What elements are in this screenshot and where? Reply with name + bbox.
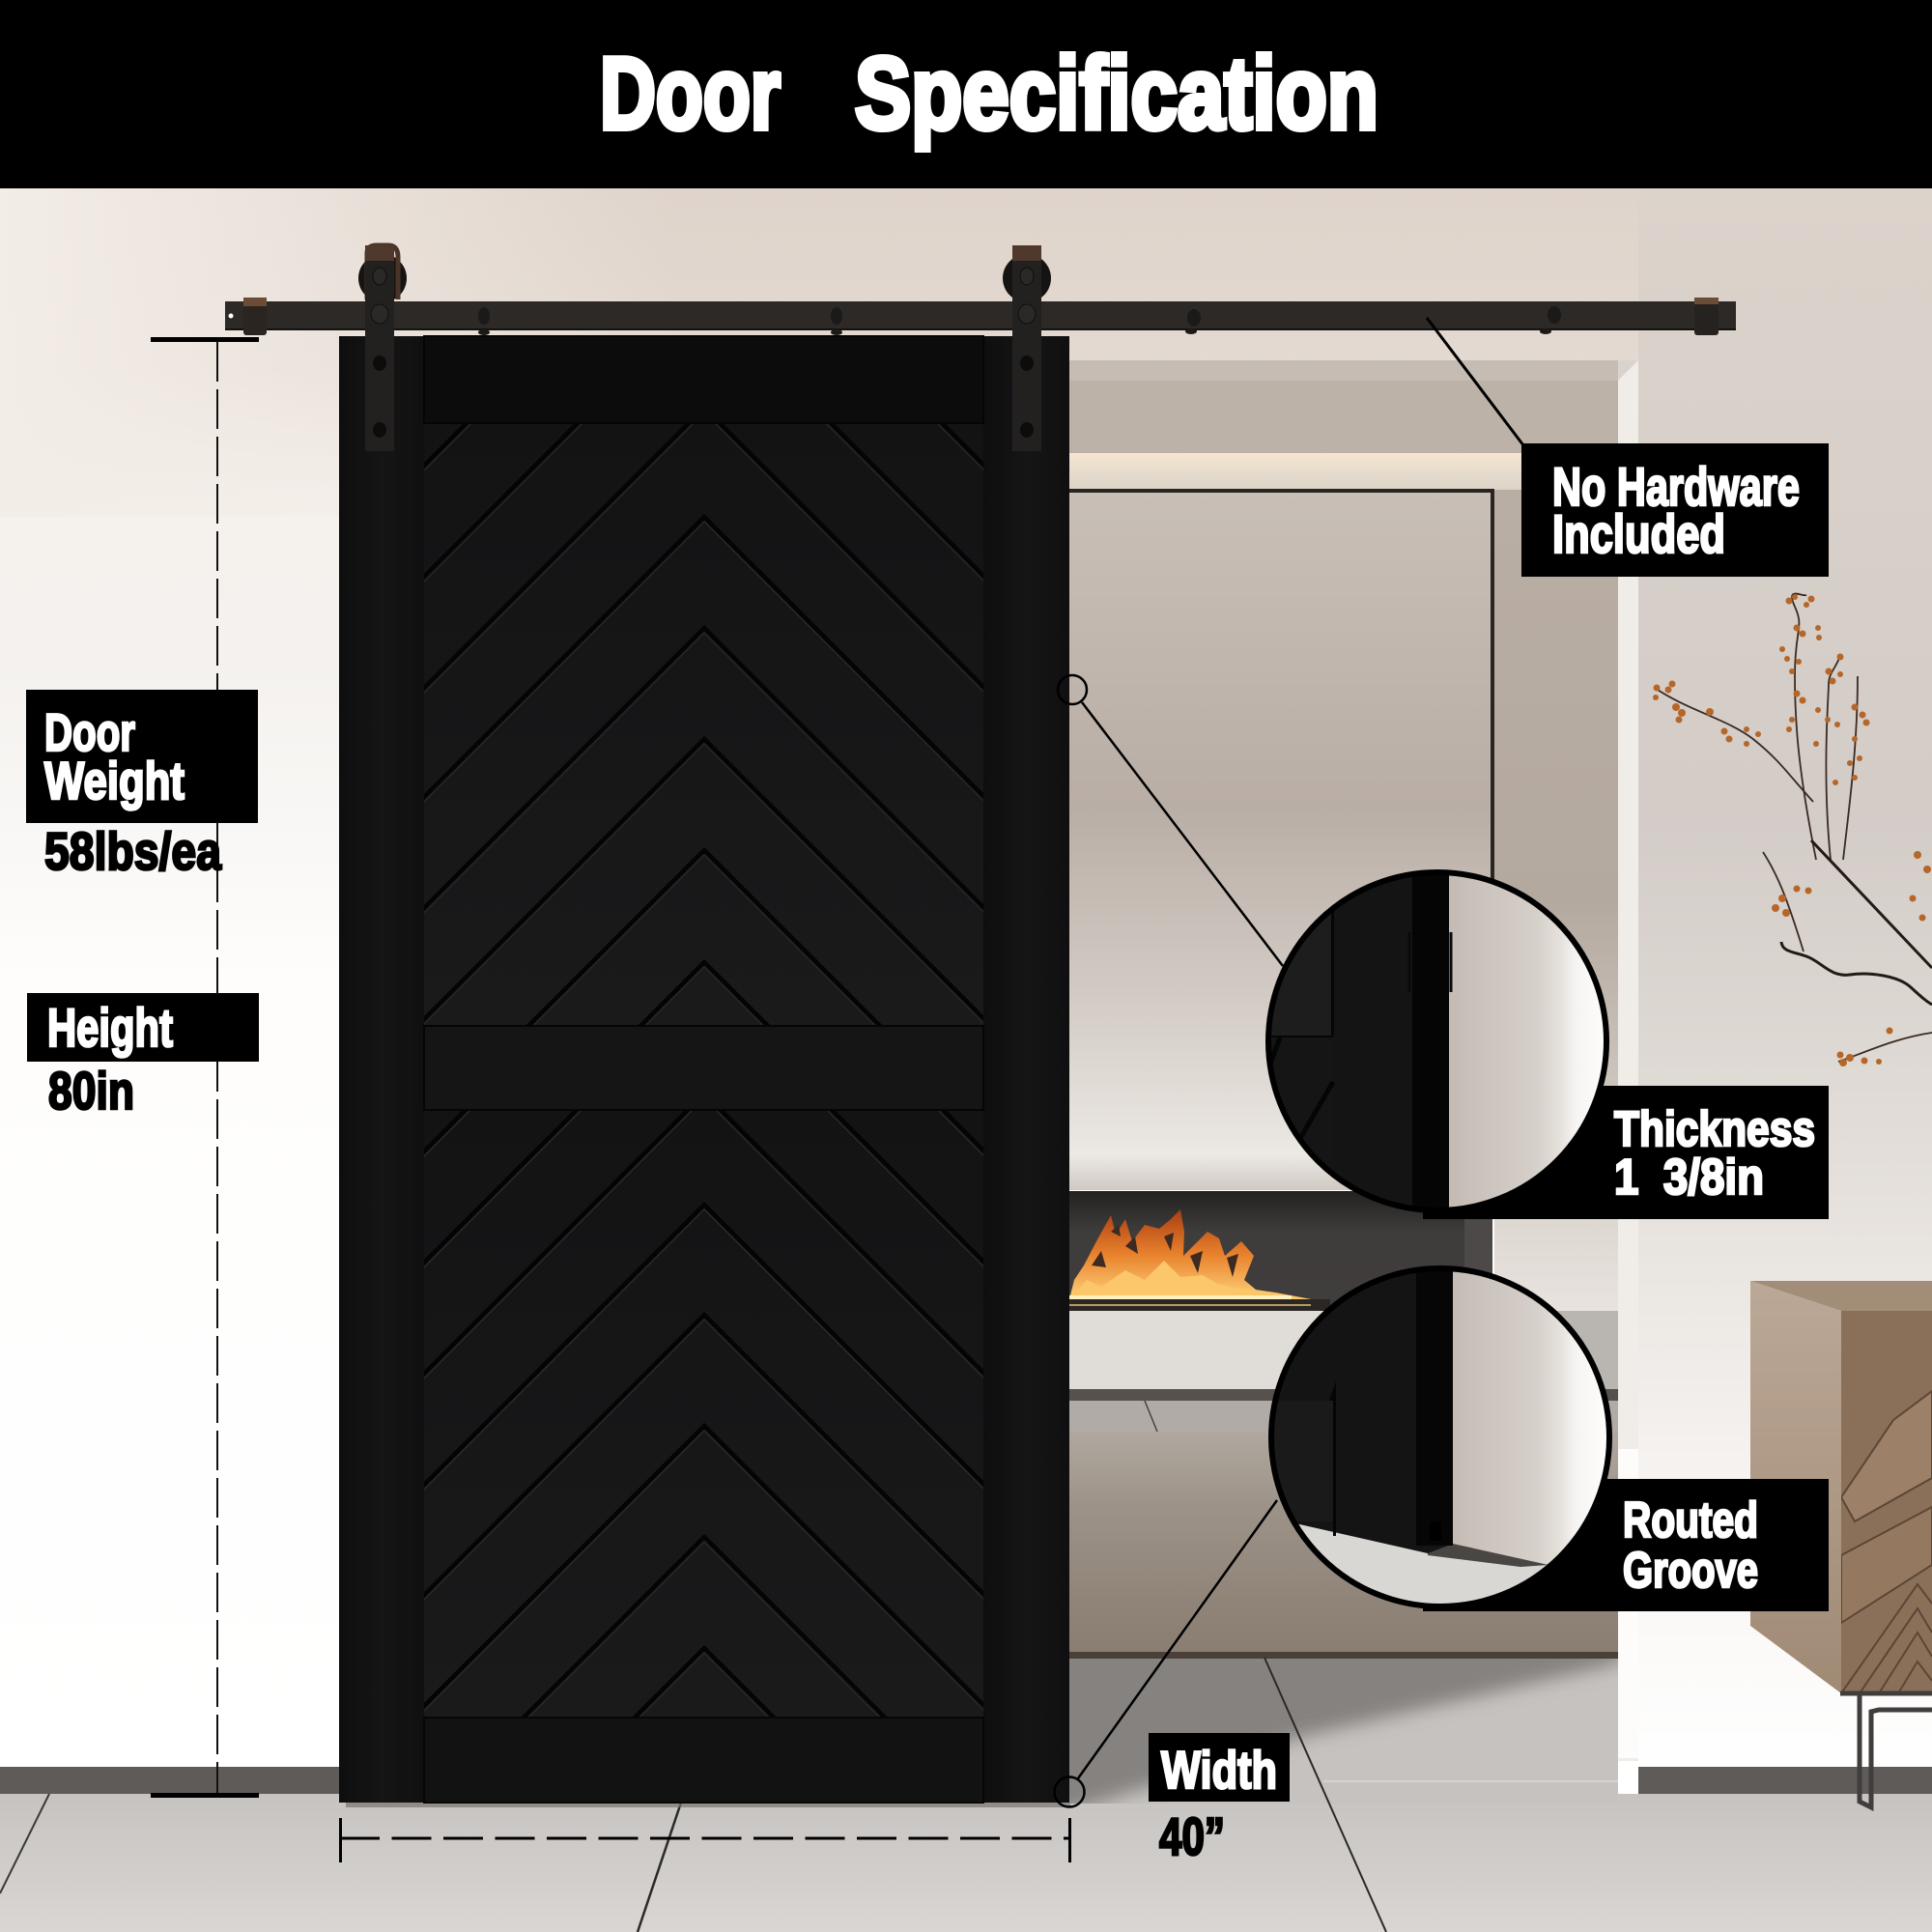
marker and leader: groove and width [1055,1500,1277,1806]
callout: no hardware included [1521,443,1829,577]
title bar: Specification [855,37,1378,151]
callout: door weight: 58lbs/ea [44,821,221,881]
callout: no hardware included: Included [1552,503,1725,564]
fireplace [1069,1191,1492,1311]
bottom rail [424,1718,983,1803]
sliding track hardware [225,245,1736,451]
marker and leader: thickness [1058,675,1283,966]
middle rail [424,1026,983,1110]
callout: thickness [1423,1086,1829,1219]
baseboards and main floor [0,1767,1932,1932]
right stile [983,336,1069,1803]
cabinet [1750,1281,1932,1807]
interior floor [1069,1658,1618,1932]
callout: width: Width [1161,1740,1277,1800]
detail circle: routed groove [1265,1265,1613,1613]
callout: routed groove: Groove [1623,1543,1758,1599]
callout: thickness: 1 3/8in [1614,1150,1764,1206]
callout: height: Height [47,997,173,1058]
track [225,301,1736,330]
callout: no hardware included: No Hardware [1552,456,1800,517]
callout: height [27,993,259,1121]
left track stop [243,298,267,335]
title: Door [600,37,781,151]
upper chevron panel [424,424,983,1025]
marble ledge and rear floor [1069,1311,1618,1659]
callout: door weight: Weight [44,751,185,810]
callout: height: 80in [48,1061,134,1121]
wall plant branches with berries [1653,593,1932,1066]
track bolts [478,306,1561,335]
callout: width [1149,1733,1290,1866]
top rail [424,336,983,423]
left stile [339,336,424,1803]
callout: routed groove: Routed [1623,1492,1758,1548]
barn door [339,335,1070,1807]
lower chevron panel [424,1111,983,1717]
right track stop [1694,298,1719,335]
callout: door weight: Door [44,702,135,762]
callout: door weight [26,690,258,881]
width dimension line [339,1818,1071,1862]
leader line: no hardware [1427,318,1523,445]
callout: width: 40” [1159,1806,1225,1866]
left hanger [358,245,407,451]
doorway opening with interior room [1053,360,1638,1932]
title bar [0,0,1932,188]
callout: thickness: Thickness [1614,1101,1815,1156]
right hanger [1003,245,1051,451]
detail circle: door thickness [1265,869,1613,1221]
height dimension line [151,337,259,1798]
callout: routed groove [1423,1479,1829,1611]
